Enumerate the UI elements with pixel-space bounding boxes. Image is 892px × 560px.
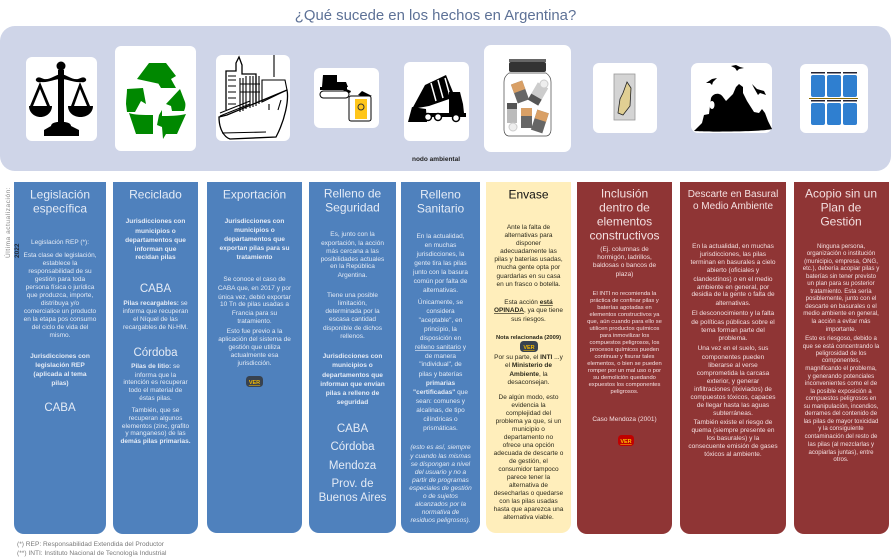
text block: Córdoba: todo el material de <box>129 387 183 394</box>
text block: su manipulación, incendios, <box>804 403 879 410</box>
text block: tratamiento. <box>237 318 272 325</box>
text block: Únicamente, se <box>418 297 463 306</box>
text block: pilas y baterías usadas, <box>494 256 563 263</box>
heading: o Medio Ambiente <box>693 201 773 212</box>
heading <box>589 186 660 242</box>
jurisdictions list <box>319 423 387 504</box>
text block: CABA <box>123 300 189 331</box>
text block: elementos, o bien se pueden <box>587 361 662 367</box>
icon: scales of justice <box>26 57 97 141</box>
bold text: jurisdictions: pilas) <box>51 380 69 387</box>
italic note: del usuario y no a <box>415 469 467 476</box>
text block: Ninguna persona, <box>817 243 865 250</box>
footnotes <box>17 541 167 557</box>
text block: utilicen productos químicos <box>590 326 660 332</box>
text block: problema. <box>719 335 748 342</box>
text block: OPINADA, ya que tiene <box>494 307 563 314</box>
icon: garbage dump silhouette <box>691 63 772 133</box>
bold text: jurisdictions: municipios o <box>135 228 176 235</box>
heading: Seguridad <box>325 200 380 214</box>
text block: infiltraciones (lixiviados) de <box>694 386 772 393</box>
text block: advice: parece tener la <box>507 474 551 481</box>
text block: jurisdicciones, las pilas <box>699 251 767 258</box>
text block: comercialice un producto <box>24 308 97 315</box>
panel: Legislación específica <box>14 182 106 534</box>
icon: bulldozer and sealed container <box>314 68 379 128</box>
text block: exterior, y generar <box>707 378 760 385</box>
button: VER: VER <box>620 439 632 445</box>
text block: adecuadamente las <box>500 248 558 255</box>
text block: en la etapa pos consumo <box>24 316 97 323</box>
text block: Córdoba <box>120 363 191 445</box>
bold text: jurisdictions: Jurisdicciones con <box>30 353 90 360</box>
text block: un plan para su posterior <box>807 280 875 287</box>
heading <box>324 186 382 214</box>
text block: limitación, <box>338 300 367 307</box>
text block: sean: comunes y <box>416 398 466 405</box>
text block: continuar y fisurar tales <box>595 354 655 360</box>
text block: terminan en basurales a cielo <box>691 259 776 266</box>
text block: rellenos. <box>340 333 365 340</box>
subheading: (Ej. columnas de <box>600 246 649 253</box>
text block: responsabilidad de su <box>28 268 92 275</box>
text block: Se conoce el caso de <box>223 276 286 283</box>
text block: Córdoba: intención es recuperar <box>123 379 188 386</box>
icon: recycling symbol <box>115 46 196 151</box>
text block: advice: hasta que aparezca una <box>494 506 564 513</box>
text block: Ante la falta de <box>507 224 551 231</box>
bold text: jurisdictions <box>125 218 186 261</box>
italic note: normativa de <box>422 509 460 516</box>
text block: El INTI no recomienda la <box>593 291 657 297</box>
text block: Córdoba: demás pilas primarias. <box>120 438 191 445</box>
text block: determinada por la <box>325 308 380 315</box>
heading: específica <box>33 202 87 216</box>
bold text: jurisdictions: tratamiento <box>237 254 272 261</box>
panel: Reciclado <box>113 182 198 534</box>
subheading: baldosas o bancos de <box>593 262 657 269</box>
button: VER <box>520 341 538 352</box>
text block: advice: Por su parte, el INTI ...y <box>494 354 564 361</box>
text block: más cercana a las <box>326 248 380 255</box>
heading: Inclusión <box>601 186 648 200</box>
footnotes: (*) REP: Responsabilidad Extendida del Productor <box>17 541 165 548</box>
icon: dump truck <box>404 62 469 141</box>
text block: componentes, <box>822 357 860 364</box>
heading: constructivos <box>589 228 660 242</box>
jurisdictions list: Mendoza <box>329 460 377 472</box>
bold text: jurisdictions: seguridad <box>337 399 368 406</box>
text block: compuestos peligrosos, los <box>590 340 660 346</box>
text block: compuestos tóxicos, capaces <box>691 394 776 401</box>
bold text: jurisdictions: exportan pilas para su <box>220 245 290 252</box>
text block <box>412 233 468 432</box>
icon: battery inside a column <box>593 63 657 133</box>
bold text: jurisdictions: departamentos que <box>224 236 285 243</box>
text block: advice: desecharlas o quedarse <box>494 490 564 497</box>
text block: principio, la <box>424 326 457 333</box>
text block: advice: el Ministerio de <box>505 362 552 369</box>
text block: de políticas públicas sobre el <box>691 319 775 326</box>
heading: Legislación <box>30 188 90 202</box>
text block: 10 Tn de pilas usadas a <box>220 301 289 308</box>
text block: organización o institución <box>807 250 875 257</box>
text block: Córdoba: recuperan algunos <box>129 415 183 422</box>
heading <box>805 186 877 228</box>
text block: abierto (oficiales y <box>707 267 760 274</box>
text block: baterías agotadas en <box>597 305 652 311</box>
text block: descarte en basurales o el <box>805 303 877 310</box>
text block: que produzca, importe, <box>27 292 93 299</box>
bold text: jurisdictions: municipios o <box>332 362 373 369</box>
text block: Córdoba: y manganeso) de las <box>125 430 186 437</box>
text block: advice: complejidad del <box>506 410 552 417</box>
text block: etc.), debería acopiar pilas y <box>803 265 880 272</box>
panel: Relleno de Seguridad <box>309 182 396 533</box>
text block: elementos constructivos ya <box>590 312 660 318</box>
text block: de manera <box>425 353 456 360</box>
text block: jurisdicciones, la <box>416 251 465 258</box>
italic note: se dispongan a nivel <box>411 461 471 468</box>
text block: Es, junto con la <box>330 231 375 238</box>
text block: alternativas para <box>504 232 553 239</box>
text block: que se está concentrando la <box>803 343 880 350</box>
text block: "aceptable", en <box>419 317 463 324</box>
text block: Legislación REP (*): <box>31 239 89 246</box>
jurisdictions list: CABA <box>337 423 368 435</box>
subheading: plaza) <box>616 271 633 278</box>
text block: advice: evidencia la <box>511 402 546 409</box>
text block: alternativas. <box>423 287 458 294</box>
bold text: jurisdictions: (aplicada al tema <box>33 371 87 378</box>
text block: advice: adecuada de descarte o <box>494 450 564 457</box>
icon: jar with batteries <box>484 45 571 152</box>
button: VER: VER <box>523 345 535 351</box>
button: VER <box>618 435 634 446</box>
text block: Esta clase de legislación, <box>24 252 97 259</box>
text block <box>24 239 97 339</box>
text block: Córdoba: Pilas de litio: se <box>131 363 180 370</box>
heading: Relleno de <box>324 186 382 200</box>
side note: last update: 2022 <box>14 243 21 258</box>
text block: acopiarlas juntas), entre <box>808 449 874 456</box>
text block: derrames del contenido de <box>805 410 878 417</box>
text block: en un frasco o botella. <box>497 281 561 288</box>
text block: comprometida la carcasa <box>697 370 770 377</box>
button: VER <box>246 376 263 387</box>
text block: posiblemente, junto con el <box>806 295 876 302</box>
text block: advice: municipio o <box>512 426 545 433</box>
text block: expuestos los componentes <box>589 382 661 388</box>
text block <box>803 243 880 463</box>
text block <box>321 231 385 340</box>
text block: Córdoba: informa que la <box>135 372 176 379</box>
button: VER: VER <box>249 380 260 386</box>
text block: compuestos peligrosos en <box>806 395 876 402</box>
text block: distribuya y/o <box>41 300 80 307</box>
text block: tóxicos al ambiente. <box>704 451 762 458</box>
italic note: y cuando las mismas <box>409 453 472 460</box>
text block: gestión para toda <box>35 276 86 283</box>
text block: aplicación del sistema de <box>218 336 291 343</box>
text block: advice: desaconsejan. <box>508 379 550 386</box>
text block: advice: alternativa de <box>509 482 548 489</box>
heading: Reciclado <box>129 188 182 202</box>
panel: Envase <box>486 182 571 533</box>
text block: persona física o jurídica <box>26 284 95 291</box>
text block: del ciclo de vida del <box>32 324 89 331</box>
icon: container ship <box>216 55 290 141</box>
bold text: jurisdictions: Jurisdicciones con <box>225 218 284 225</box>
bold text: jurisdictions: departamentos que <box>322 372 383 379</box>
side note: last update <box>3 187 21 258</box>
text block: También existe el riesgo de <box>694 419 773 426</box>
jurisdiction: CABA: CABA <box>44 402 76 414</box>
text block: gestión que utiliza <box>228 344 281 351</box>
text block: importante. <box>826 326 857 333</box>
jurisdiction: CABA: CABA <box>140 283 171 295</box>
italic note: residuos peligrosos). <box>411 517 471 524</box>
text block: quema (siempre presente en <box>691 427 775 434</box>
text block: clandestinos) o en el medio <box>693 276 773 283</box>
panel: Relleno Sanitario <box>401 182 480 533</box>
heading: Descarte en Basural <box>688 189 778 200</box>
bold text: jurisdictions <box>220 218 290 261</box>
italic note: especiales de gestión <box>409 485 472 492</box>
jurisdictions list: Córdoba <box>330 441 375 453</box>
text block: advice: alternativa viable. <box>503 514 554 521</box>
text block: Córdoba: elementos (zinc, grafito <box>122 423 189 430</box>
heading: Gestión <box>820 214 862 228</box>
text block: En la actualidad, <box>416 233 465 240</box>
text block: mismo. <box>50 332 71 339</box>
text block: sus riesgos. <box>511 316 546 323</box>
heading <box>30 188 90 216</box>
text block: Argentina. <box>338 272 368 279</box>
heading: Exportación <box>223 188 286 202</box>
text block: advice: problema ya que, si un <box>496 418 562 425</box>
text block: Tiene una posible <box>327 292 378 299</box>
text block: peligrosidad de los <box>816 350 866 357</box>
panel: icon band <box>0 26 891 171</box>
text block: en la República <box>330 263 375 270</box>
text block: peligrosos. <box>610 389 639 395</box>
heading <box>688 189 778 212</box>
text block: disponer <box>516 240 542 247</box>
italic note: partir de programas <box>411 477 470 484</box>
panel: Inclusión dentro de elementos constructivos <box>577 182 672 534</box>
text block: su demolición quedando <box>593 375 656 381</box>
text block: Francia para su <box>232 310 277 317</box>
text block: subterráneas. <box>713 410 753 417</box>
text block: "certificadas" que <box>413 389 468 396</box>
text block: Esto es riesgoso, debido a <box>805 335 878 342</box>
logo: nodo ambiental: nodo ambiental <box>412 156 460 163</box>
heading: Envase <box>508 188 549 202</box>
text block: la posible exposición a <box>810 388 872 395</box>
text block: práctica de confinar pilas y <box>590 298 659 304</box>
text block: en muchas <box>425 242 457 249</box>
text block: advice: de gestión, el <box>509 458 548 465</box>
text block <box>587 291 662 395</box>
bold text: jurisdictions: recidan pilas <box>135 254 176 261</box>
text block: El desconocimiento y la falta <box>692 310 775 317</box>
text block: Córdoba: También, que se <box>132 407 180 414</box>
text block: (municipio, empresa, ONG, <box>804 258 878 265</box>
panel: Descarte en Basural o Medio Ambiente <box>680 182 786 534</box>
bold text: jurisdictions: Jurisdicciones con <box>126 218 185 225</box>
text block: alternativas. <box>715 300 751 307</box>
text block <box>688 243 778 458</box>
text block <box>218 276 292 367</box>
heading: Acopio sin un <box>805 186 877 200</box>
text block: de llegar hasta las aguas <box>697 402 770 409</box>
text block: que, aún cuando para ello se <box>587 319 662 325</box>
text block: Esto fue previo a la <box>227 328 283 335</box>
text block: procesos químicos pueden <box>590 347 659 353</box>
text block: romper por un mal uso o por <box>588 368 661 374</box>
text block: contaminación del resto de <box>805 433 878 440</box>
italic note <box>409 444 472 524</box>
text block: establece la <box>43 260 78 267</box>
text block: y la consiguiente <box>818 425 864 432</box>
bold text: jurisdictions: informan que <box>135 246 177 253</box>
text block: liberarse al verse <box>708 362 758 369</box>
text block: advice: consumidor tampoco <box>498 466 559 473</box>
text block: tema forman parte del <box>701 327 765 334</box>
text block: baterías sin tener previsto <box>806 273 877 280</box>
text block: para inmovilizar los <box>600 333 649 339</box>
text block: la acción a evitar más <box>812 318 870 325</box>
text block: única vez, debió exportar <box>218 294 292 301</box>
text block: advice: De algún modo, esto <box>499 394 559 401</box>
icon: stacked blue barrels <box>800 64 868 133</box>
text block: disposición en <box>420 335 461 342</box>
text block: disponible de dichos <box>323 325 383 332</box>
bold text: jurisdictions <box>320 353 385 406</box>
related note: Nota relacionada (2009) <box>496 335 561 341</box>
text block: guardarlas en su casa <box>497 273 561 280</box>
text block: primarias <box>426 380 456 387</box>
text block: Córdoba: éstas pilas. <box>139 395 172 402</box>
text block: advice: Ambiente, la <box>509 371 548 378</box>
bold text: jurisdictions: municipios o <box>234 227 275 234</box>
text block: Esta acción está <box>504 299 553 306</box>
text block: común por falta de <box>414 278 468 285</box>
heading: dentro de <box>599 200 650 214</box>
text block: advice <box>494 354 564 521</box>
footnotes: (**) INTI: Instituto Nacional de Tecnología Industrial <box>17 550 167 557</box>
text block: advice: ofrece una opción <box>503 442 555 449</box>
text block: actualmente esa <box>231 352 279 359</box>
bold text: jurisdictions: departamentos que <box>125 237 186 244</box>
text block: CABA: el Níquel de las <box>133 316 179 323</box>
bold text: jurisdictions <box>30 353 90 387</box>
text block: alcalinas, de tipo <box>416 407 465 414</box>
case reference: Caso Mendoza (2001) <box>592 416 657 423</box>
text block: los basurales) y la <box>707 435 760 442</box>
jurisdictions list: Buenos Aires <box>319 492 387 504</box>
title: ¿Qué sucede en los hechos en Argentina? <box>295 8 576 24</box>
heading: elementos <box>597 214 652 228</box>
bold text: jurisdictions: informan que envían <box>320 381 385 388</box>
text block: En la actualidad, en muchas <box>692 243 775 250</box>
subheading: hormigón, ladrillos, <box>597 254 652 261</box>
text block: considera <box>426 308 455 315</box>
text block: pilas y baterías <box>419 371 463 378</box>
heading: Relleno <box>420 188 461 202</box>
text block: consecuente emisión de gases <box>688 443 778 450</box>
text block: "individual", de <box>419 361 462 368</box>
text block: CABA: Pilas recargables: se <box>123 300 188 307</box>
text block: prismáticas. <box>423 425 458 432</box>
text block: posibilidades actuales <box>321 256 385 263</box>
text block: las pilas de mayor toxicidad <box>804 418 878 425</box>
text block: y generando potenciales <box>808 373 874 380</box>
heading: Sanitario <box>417 202 464 216</box>
text block: ambiente en general, por <box>697 284 770 291</box>
panel: Acopio sin un Plan de Gestión <box>794 182 889 534</box>
text block: tratamiento. Esta sería <box>810 288 872 295</box>
jurisdiction: Córdoba: Córdoba <box>133 347 178 359</box>
text block: cilíndricas o <box>423 416 458 423</box>
italic note: alcanzados por la <box>415 501 466 508</box>
text block: las pilas (al mezclarlas y <box>808 441 875 448</box>
bold text: jurisdictions: pilas a relleno de <box>326 390 380 397</box>
heading <box>417 188 464 216</box>
text block: mucha gente opta por <box>497 264 561 271</box>
text block: componentes pueden <box>702 354 765 361</box>
bold text: jurisdictions: Jurisdicciones con <box>323 353 382 360</box>
text block <box>494 224 563 323</box>
text block: desidia de la gente o falta de <box>691 291 775 298</box>
text block: junto con la basura <box>412 269 468 276</box>
text block: gente tira las pilas <box>414 260 467 267</box>
text block: escasa cantidad <box>329 316 376 323</box>
text block: CABA: recargables de Ni-HM. <box>123 324 188 331</box>
text block: CABA que, en 2017 y por <box>218 285 292 292</box>
italic note: o de sujetos <box>423 493 459 500</box>
side note: last update: Última actualización: <box>3 187 12 258</box>
text block: relleno sanitario y <box>415 344 467 351</box>
bold text: jurisdictions: legislación REP <box>35 362 85 369</box>
jurisdictions list: Prov. de <box>332 478 373 490</box>
text block: CABA: informa que recuperan <box>123 308 189 315</box>
text block: exportación, la acción <box>321 240 384 247</box>
text block: magnificando el problema, <box>805 365 877 372</box>
subheading <box>593 246 657 278</box>
text block: medio ambiente en general, <box>803 310 879 317</box>
text block: advice: con las pilas usadas <box>499 498 559 505</box>
text block: otros. <box>833 456 849 463</box>
heading: Plan de <box>821 200 862 214</box>
text block: Una vez en el suelo, sus <box>698 345 769 352</box>
text block: inconvenientes como el de <box>805 380 878 387</box>
text block: jurisdicción. <box>237 360 272 367</box>
text block: advice: departamento no <box>504 434 553 441</box>
panel: Exportación <box>207 182 302 533</box>
italic note: (esto es así, siempre <box>410 444 471 451</box>
